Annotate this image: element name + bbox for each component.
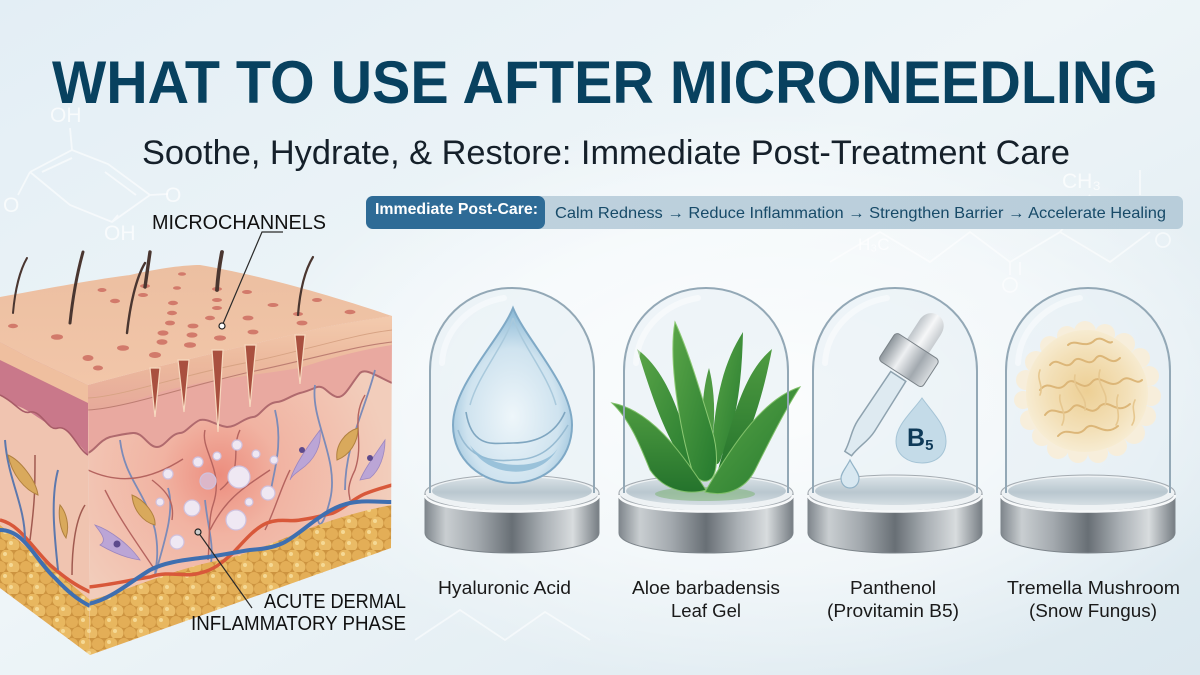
hairs	[13, 252, 313, 333]
label: aloe	[632, 577, 780, 621]
background molecule right	[415, 170, 1170, 640]
callout: acute dermal inflammatory phase: ACUTE DERMAL	[264, 591, 406, 613]
icon: B5 droplet: 5	[925, 437, 933, 454]
callout: acute dermal inflammatory phase	[191, 529, 406, 635]
right face of skin	[85, 310, 395, 660]
icon: dropper	[826, 301, 960, 468]
blood vessel branches	[120, 370, 375, 575]
icon: small droplet	[841, 460, 859, 488]
label: tremella: (Snow Fungus)	[1029, 600, 1157, 621]
background molecule left: OH	[104, 222, 136, 245]
label: panthenol	[827, 577, 959, 621]
microchannel slits	[150, 335, 305, 432]
fat layer	[90, 505, 392, 660]
immediate post-care bar	[366, 196, 1183, 229]
epidermis	[88, 316, 392, 453]
subtitle: Soothe, Hydrate, & Restore: Immediate Post-Treatment Care	[142, 134, 1070, 172]
label: aloe: Leaf Gel	[671, 600, 741, 621]
background molecule right: H₃C	[858, 235, 889, 254]
post-care label pill: Immediate Post-Care:	[375, 201, 538, 218]
icon: B5 droplet: B	[907, 424, 925, 452]
stratum corneum band	[88, 316, 392, 410]
label: aloe: Aloe barbadensis	[632, 577, 780, 598]
product: hyaluronic acid dome	[425, 288, 599, 553]
background molecule left: O	[165, 184, 181, 207]
top skin surface	[0, 265, 392, 385]
label: tremella: Tremella Mushroom	[1007, 577, 1180, 598]
dermal boundary	[88, 371, 392, 453]
callout: microchannels	[152, 212, 326, 329]
icon: water drop	[453, 308, 572, 483]
callout: acute dermal inflammatory phase: INFLAMMATORY PHASE	[191, 613, 406, 635]
purple fibroblasts	[95, 430, 385, 560]
tan cells left	[8, 455, 68, 538]
background molecule left	[3, 104, 181, 245]
product: tremella dome	[1001, 288, 1175, 553]
icon: aloe plant	[612, 322, 800, 501]
background molecule right: CH₃	[1062, 170, 1101, 193]
icon: tremella mushroom	[1014, 321, 1161, 463]
callout: microchannels: MICROCHANNELS	[152, 212, 326, 234]
post-care steps: Calm Redness → Reduce Inflammation → Strengthen Barrier → Accelerate Healing	[555, 205, 1166, 222]
icon: B5 droplet	[896, 398, 946, 463]
label: panthenol: Panthenol	[850, 577, 936, 598]
label: panthenol: (Provitamin B5)	[827, 600, 959, 621]
blue vein	[88, 501, 392, 604]
skin cross-section illustration	[0, 252, 395, 660]
tan cells right	[132, 428, 358, 525]
left face of skin	[0, 340, 90, 660]
product: aloe dome	[612, 288, 800, 553]
background molecule left: OH	[50, 104, 82, 127]
inflammatory cells	[156, 440, 278, 549]
microneedling pores	[8, 272, 356, 370]
label: hyaluronic acid: Hyaluronic Acid	[438, 577, 571, 598]
background molecule left: O	[3, 194, 19, 217]
product: panthenol dome	[808, 288, 982, 553]
post-care label pill	[366, 196, 545, 229]
label: tremella	[1007, 577, 1180, 621]
title: WHAT TO USE AFTER MICRONEEDLING	[52, 49, 1158, 116]
red artery	[88, 485, 392, 587]
